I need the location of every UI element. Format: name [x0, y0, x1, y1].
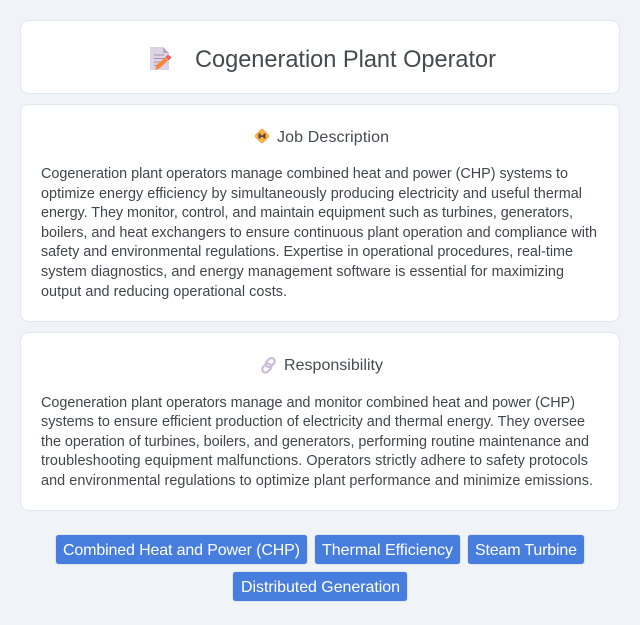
tags — [56, 534, 584, 602]
icon: diamond sign — [254, 128, 270, 144]
tag: distributed generation: Distributed Generation — [241, 579, 400, 596]
text block: responsibility: Cogeneration plant operators manage and monitor combined heat and power (CHP) — [41, 395, 575, 411]
title: Cogeneration Plant Operator — [195, 47, 496, 73]
text block: responsibility: and environmental regulations to optimize plant performance and minimize emissions. — [41, 473, 593, 489]
text block: job description: system diagnostics, and energy management software is essential for maximizing — [41, 264, 564, 280]
text block: job description: boilers, and heat exchangers to ensure continuous plant operation and compliance with — [41, 225, 597, 241]
heading: responsibility: Responsibility — [284, 357, 383, 374]
panel: title header — [20, 20, 620, 94]
text block: responsibility: troubleshooting equipment malfunctions. Operators strictly adhere to safety protocols — [41, 453, 588, 469]
text block: job description: optimize energy efficiency by simultaneously producing electricity and useful thermal — [41, 186, 582, 202]
text block: job description: Cogeneration plant operators manage combined heat and power (CHP) systems to — [41, 166, 568, 182]
tag: thermal efficiency: Thermal Efficiency — [322, 542, 453, 559]
text block: responsibility: systems to ensure efficient production of electricity and thermal energy. They oversee — [41, 414, 585, 430]
icon: document with pencil — [150, 47, 172, 70]
tag: combined heat and power — [56, 534, 308, 564]
text block: job description: output and reducing operational costs. — [41, 284, 287, 300]
text block: responsibility — [41, 395, 593, 489]
icon: chain link — [261, 357, 276, 374]
tag: steam turbine — [468, 534, 584, 564]
text block: job description: safety and environmental regulations. Expertise in operational procedures, real-time — [41, 244, 573, 260]
tag: combined heat and power: Combined Heat and Power (CHP) — [63, 542, 300, 559]
tag: distributed generation — [232, 572, 408, 602]
panel: responsibility — [20, 332, 620, 510]
text block: job description — [41, 166, 597, 300]
tag: steam turbine: Steam Turbine — [475, 542, 577, 559]
text block: responsibility: the operation of turbines, boilers, and generators, performing routine maintenance and — [41, 434, 589, 450]
panel: job description — [20, 104, 620, 322]
tag: thermal efficiency — [314, 534, 460, 564]
heading: job description: Job Description — [277, 129, 389, 146]
text block: job description: energy. They monitor, control, and maintain equipment such as turbines, generators, — [41, 205, 573, 221]
